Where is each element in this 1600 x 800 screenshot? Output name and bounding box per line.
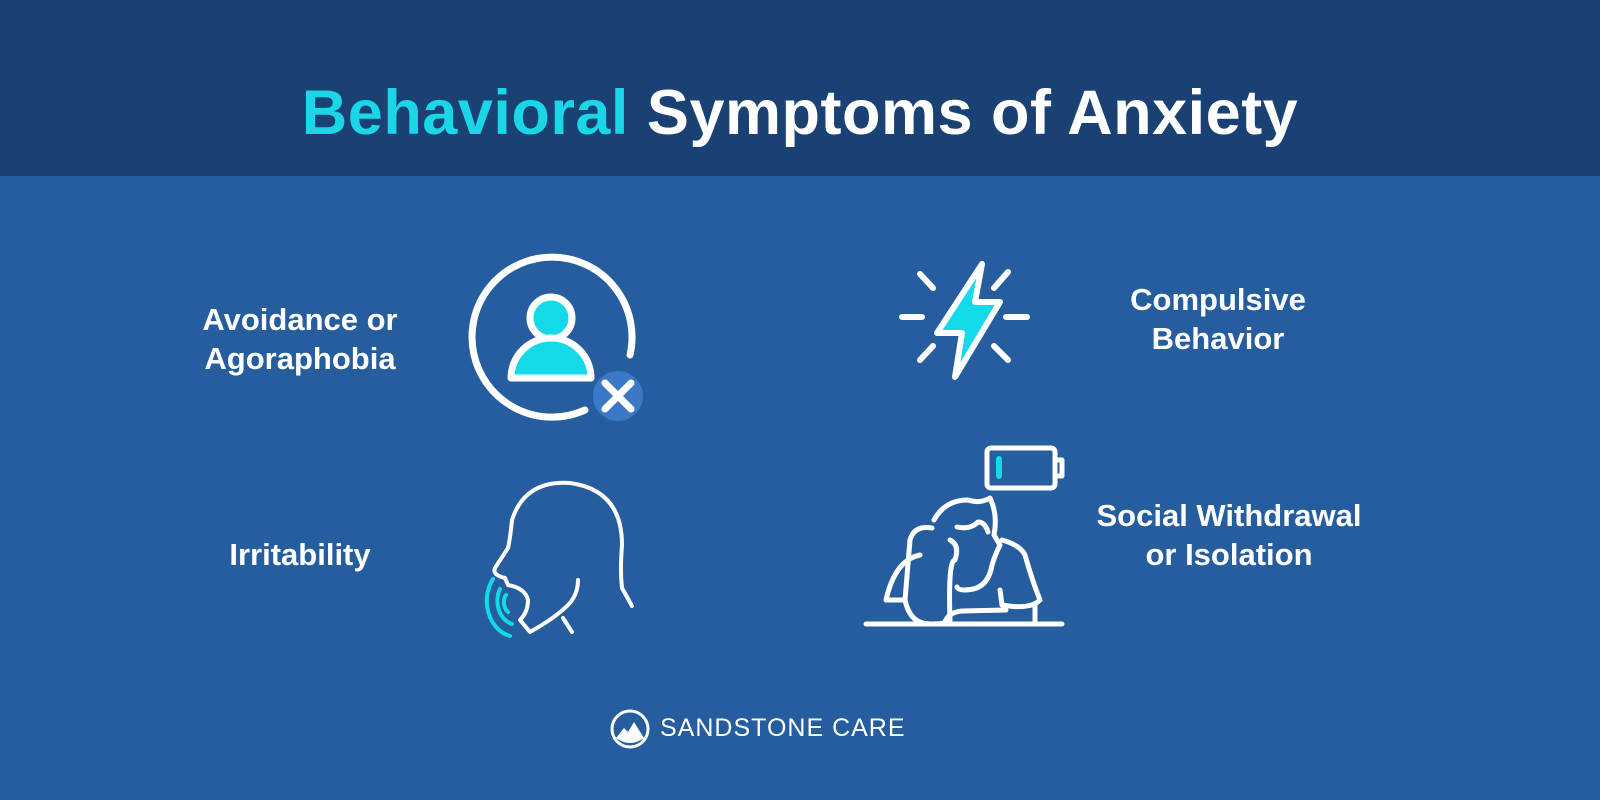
logo mark: [610, 710, 650, 748]
label: social withdrawal: or Isolation: [1145, 537, 1313, 572]
label: compulsive: Compulsive: [1130, 282, 1306, 317]
label: irritability: Irritability: [229, 537, 371, 572]
title: Behavioral Symptoms of Anxiety: [302, 78, 1298, 148]
icon: person with x: [472, 257, 643, 421]
logo: [610, 710, 906, 748]
label: avoidance: Avoidance or: [202, 302, 398, 337]
icon: lightning: [902, 264, 1027, 377]
label: social withdrawal: Social Withdrawal: [1096, 498, 1362, 533]
icon: person at desk with low battery: [866, 448, 1062, 624]
logo text: SANDSTONE CARE: [660, 714, 906, 742]
icon: head shouting: [494, 483, 632, 632]
label: social withdrawal: [1096, 498, 1362, 572]
battery level: [996, 459, 1002, 476]
label: compulsive: [1130, 282, 1306, 356]
header band: [0, 0, 1600, 176]
label: avoidance: Agoraphobia: [204, 341, 396, 376]
label: compulsive: Behavior: [1152, 321, 1284, 356]
label: avoidance: [202, 302, 398, 376]
